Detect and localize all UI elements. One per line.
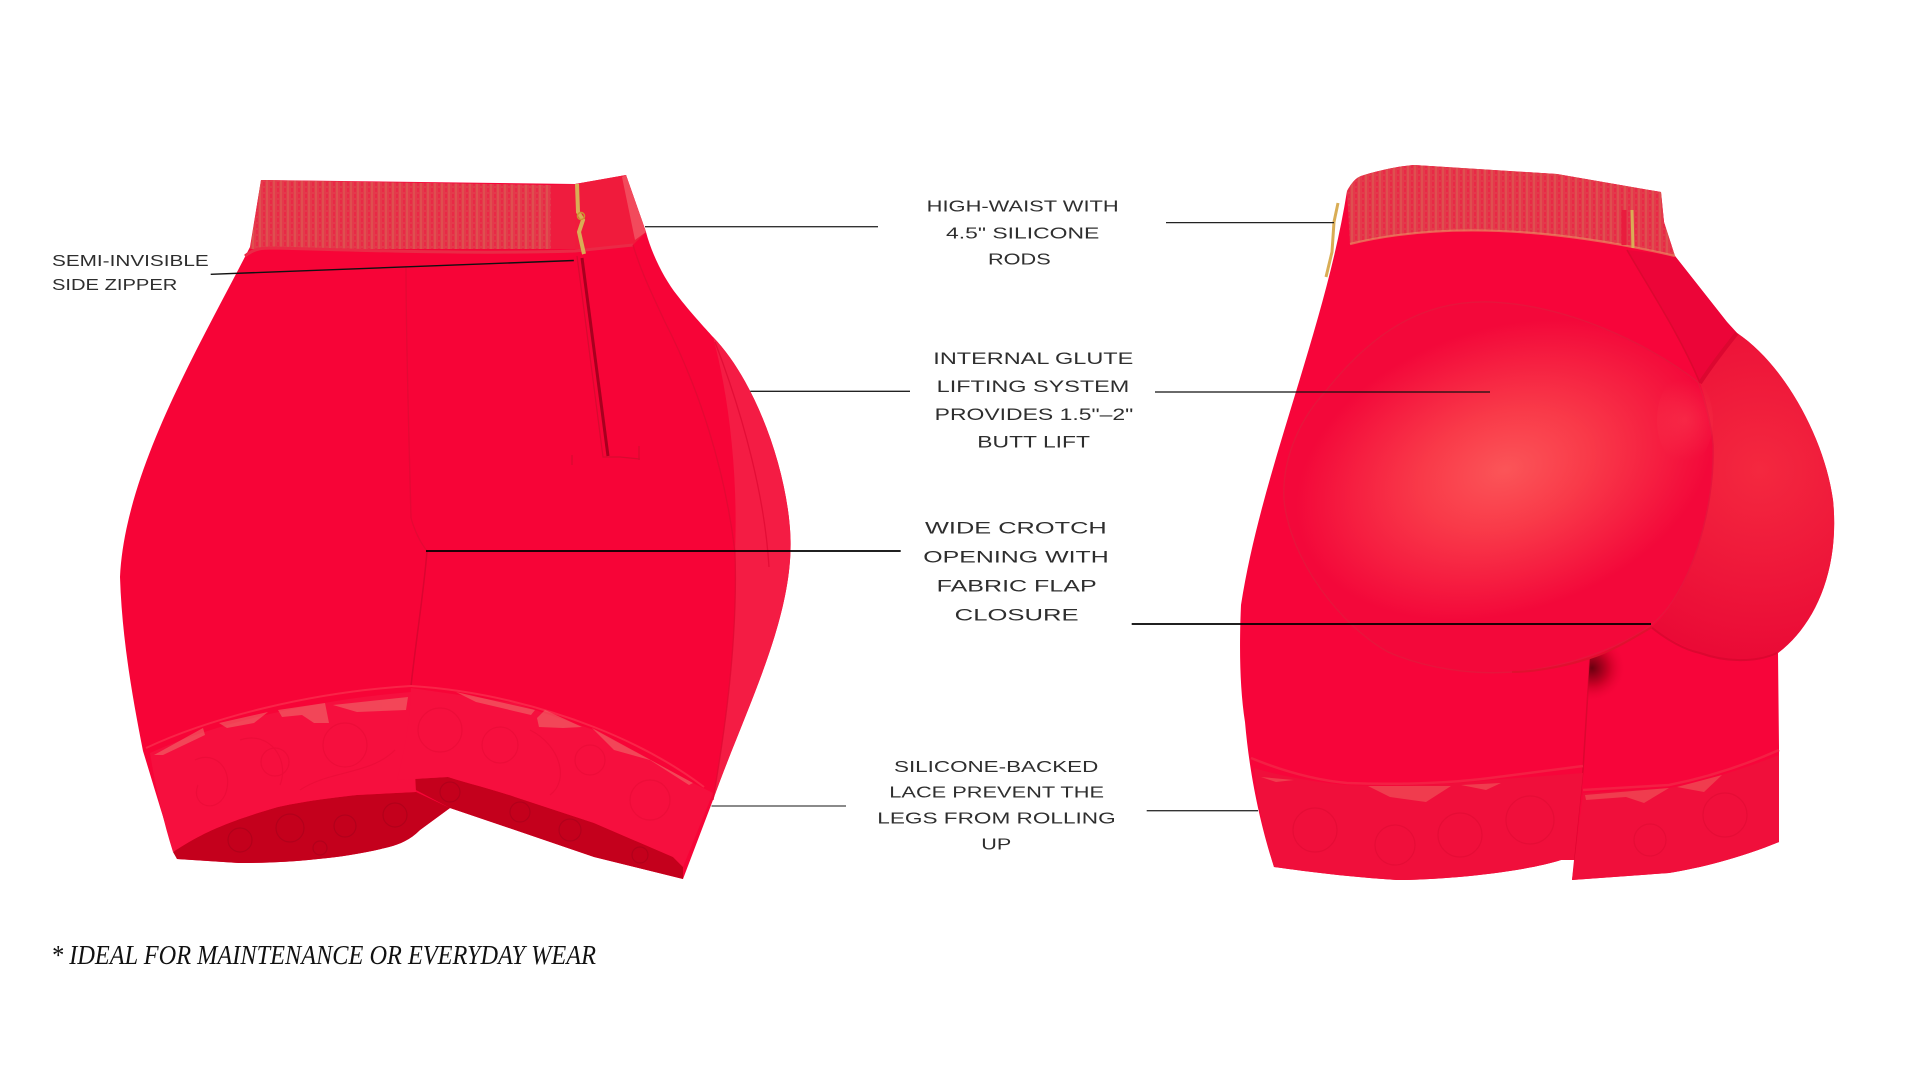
lower panel seam over shadow	[1512, 627, 1652, 672]
label: internal glute lifting system: PROVIDES 1.5"–2"	[935, 405, 1133, 424]
label: semi-invisible side zipper: SEMI-INVISIBLE	[52, 253, 209, 270]
label: silicone-backed lace: LACE PREVENT THE	[889, 785, 1104, 802]
label: silicone-backed lace: LEGS FROM ROLLING	[877, 811, 1116, 828]
front seams	[406, 245, 769, 800]
crotch seam and shading	[411, 551, 427, 686]
label: wide crotch opening: CLOSURE	[955, 606, 1079, 625]
label: wide crotch opening: OPENING WITH	[923, 547, 1109, 566]
label: wide crotch opening: FABRIC FLAP	[937, 577, 1097, 596]
yoke panel	[1627, 250, 1737, 383]
footnote: * IDEAL FOR MAINTENANCE OR EVERYDAY WEAR	[51, 940, 596, 970]
yoke and lobe seams	[1574, 250, 1777, 860]
label: high-waist with silicone rods: 4.5" SILICONE	[946, 225, 1099, 242]
glute lifting panel	[1284, 302, 1713, 673]
inner lace, left leg	[173, 792, 450, 863]
lace band, right leg	[1572, 750, 1779, 880]
back body silhouette	[1240, 165, 1834, 880]
gold zipper at side of waist	[1326, 203, 1338, 277]
label: semi-invisible side zipper	[52, 253, 209, 294]
label: internal glute lifting system: BUTT LIFT	[977, 433, 1090, 452]
label: high-waist with silicone rods: RODS	[988, 251, 1051, 268]
inner lace, right leg	[397, 777, 683, 879]
inner leg shadow	[1587, 627, 1652, 705]
label: silicone-backed lace: UP	[981, 837, 1011, 854]
back waistband	[1347, 165, 1675, 256]
label: high-waist with silicone rods: HIGH-WAIST WITH	[927, 198, 1119, 216]
label: internal glute lifting system: INTERNAL GLUTE	[933, 349, 1133, 368]
label: internal glute lifting system: LIFTING SYSTEM	[937, 377, 1129, 396]
right glute lobe	[1652, 333, 1834, 659]
label: wide crotch opening: WIDE CROTCH	[925, 518, 1107, 537]
back view of shorts	[1240, 165, 1834, 880]
lace band, left leg	[146, 686, 416, 852]
label: semi-invisible side zipper: SIDE ZIPPER	[52, 277, 177, 294]
label: silicone-backed lace: SILICONE-BACKED	[894, 759, 1098, 776]
front waistband	[245, 175, 646, 256]
rear lobe visible behind front view	[713, 337, 791, 800]
leader lines	[211, 223, 1651, 811]
label: wide crotch opening	[923, 518, 1109, 625]
lace band, left leg	[1251, 758, 1583, 880]
label: high-waist with silicone rods	[927, 198, 1119, 268]
front view of shorts	[120, 175, 791, 879]
label: internal glute lifting system	[933, 349, 1133, 452]
label: silicone-backed lace	[877, 759, 1116, 854]
lace band, right leg	[397, 686, 713, 867]
front body silhouette	[120, 175, 791, 879]
zipper with gold pull	[572, 184, 640, 465]
